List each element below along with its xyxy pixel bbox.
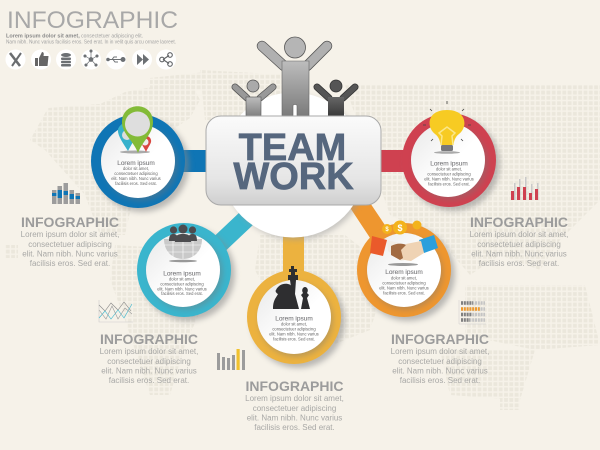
text block: right upper: facilisis eros. Sed erat. xyxy=(479,259,559,268)
text: blue ring xyxy=(111,160,161,186)
text block: right lower: Lorem ipsum dolor sit amet, xyxy=(391,347,489,356)
text: blue ring: elit. Nam nibh. Nunc varius xyxy=(111,176,161,181)
text block: centre xyxy=(245,378,344,432)
text block: left lower: INFOGRAPHIC xyxy=(100,331,198,347)
text: red ring: consectetuer adipiscing xyxy=(427,172,471,176)
figure: large centre xyxy=(262,37,327,119)
figures: team xyxy=(235,37,355,119)
text: orange ring: elit. Nam nibh. Nunc varius xyxy=(379,286,429,290)
text: red ring: dolor sit amet, xyxy=(436,166,462,172)
panel: red ring xyxy=(402,101,500,211)
mini chart: lines xyxy=(99,300,133,322)
text: cyan ring: consectetuer adipiscing xyxy=(160,282,204,286)
central card xyxy=(206,116,381,205)
text: cyan ring xyxy=(157,270,207,296)
text block: right lower: INFOGRAPHIC xyxy=(391,331,489,347)
mini chart: blue xyxy=(52,183,80,204)
panel: orange ring xyxy=(357,220,455,321)
text block: right upper: consectetuer adipiscing xyxy=(477,240,561,249)
text block: centre: INFOGRAPHIC xyxy=(246,378,344,394)
text block: right lower: facilisis eros. Sed erat. xyxy=(400,376,480,385)
text block: right lower: elit. Nam nibh. Nunc varius xyxy=(392,366,488,376)
text block: centre: elit. Nam nibh. Nunc varius xyxy=(247,414,342,422)
text: orange ring: dolor sit amet, xyxy=(391,276,417,280)
icon: handshake and coins xyxy=(370,220,438,266)
central circle xyxy=(220,92,368,240)
icon: usb xyxy=(107,57,125,62)
mini chart: rows xyxy=(459,300,486,324)
text: orange ring: consectetuer adipiscing xyxy=(382,280,426,286)
icon: handshake and coins: $ xyxy=(397,223,403,233)
panel: blue ring xyxy=(91,106,189,212)
icon: share xyxy=(160,53,172,66)
text: orange ring: Lorem ipsum xyxy=(385,269,423,276)
subtitle: Nam nibh. Nunc varius facilisis eros. Sed erat. In in velit quis arcu ornare laoreet. xyxy=(6,40,176,46)
text: blue ring: dolor sit amet, xyxy=(123,166,149,171)
text block: right upper xyxy=(470,214,568,268)
text block: left lower: consectetuer adipiscing xyxy=(107,357,191,366)
text: yellow ring: elit. Nam nibh. Nunc varius xyxy=(269,332,319,336)
text: blue ring: Lorem ipsum xyxy=(117,160,155,167)
text block: left upper: facilisis eros. Sed erat. xyxy=(30,259,110,268)
icon: fast forward xyxy=(137,54,149,65)
text: cyan ring: elit. Nam nibh. Nunc varius xyxy=(157,286,207,292)
panel: yellow ring xyxy=(247,266,345,368)
text: orange ring: facilisis eros. Sed erat. xyxy=(383,290,425,296)
text: red ring: facilisis eros. Sed erat. xyxy=(428,182,470,186)
text: orange ring xyxy=(379,269,429,296)
text block: centre: Lorem ipsum dolor sit amet, xyxy=(245,394,344,403)
icon: tools xyxy=(10,53,21,66)
text: yellow ring: consectetuer adipiscing xyxy=(272,326,316,332)
text block: left lower xyxy=(100,331,198,385)
text block: right lower: consectetuer adipiscing xyxy=(398,357,482,366)
text block: left upper: INFOGRAPHIC xyxy=(21,214,119,230)
subtitle: Lorem ipsum dolor sit amet, consectetuer adipiscing elit. xyxy=(6,34,143,40)
icon: people on globe xyxy=(164,224,202,262)
text block: right lower xyxy=(391,331,489,385)
text block: left upper: Lorem ipsum dolor sit amet, xyxy=(21,230,119,239)
text: yellow ring xyxy=(269,316,319,342)
text: red ring xyxy=(424,160,474,186)
text block: left upper xyxy=(21,214,119,268)
text: cyan ring: Lorem ipsum xyxy=(163,270,201,278)
text: yellow ring: Lorem ipsum xyxy=(275,316,313,322)
world map dots xyxy=(5,70,600,410)
text block: left upper: consectetuer adipiscing xyxy=(28,240,112,249)
text: cyan ring: facilisis eros. Sed erat. xyxy=(161,291,203,296)
text block: left lower: facilisis eros. Sed erat. xyxy=(109,376,189,385)
text: yellow ring: dolor sit amet, xyxy=(281,322,307,326)
connector bars xyxy=(175,150,415,275)
text: blue ring: consectetuer adipiscing xyxy=(114,171,158,176)
text: red ring: Lorem ipsum xyxy=(430,160,468,168)
mini chart: red xyxy=(511,177,538,200)
heading: team work: TEAM xyxy=(239,127,346,169)
text: cyan ring: dolor sit amet, xyxy=(169,276,195,282)
icon: chess pieces xyxy=(273,266,310,309)
icon: light bulb xyxy=(423,101,471,154)
text: red ring: elit. Nam nibh. Nunc varius xyxy=(424,176,474,182)
heading: team work: WORK xyxy=(233,156,354,198)
icon: thumbs up xyxy=(35,52,48,66)
title: INFOGRAPHIC xyxy=(7,7,178,34)
panel: cyan ring xyxy=(137,223,235,321)
icon: database xyxy=(61,53,71,66)
text: blue ring: facilisis eros. Sed erat. xyxy=(115,181,157,186)
text block: left lower: Lorem ipsum dolor sit amet, xyxy=(100,347,198,356)
text: yellow ring: facilisis eros. Sed erat. xyxy=(273,336,315,342)
mini chart: yellow xyxy=(217,349,245,370)
text block: left upper: elit. Nam nibh. Nunc varius xyxy=(22,250,118,258)
figure: right small xyxy=(317,80,355,119)
figure: left small xyxy=(235,80,273,119)
text block: centre: facilisis eros. Sed erat. xyxy=(254,423,335,432)
text block: left lower: elit. Nam nibh. Nunc varius xyxy=(101,366,197,376)
text block: centre: consectetuer adipiscing xyxy=(253,404,336,413)
icon: map pins xyxy=(118,106,153,154)
icon row xyxy=(6,50,176,70)
text block: right upper: elit. Nam nibh. Nunc varius xyxy=(471,250,567,258)
text block: right upper: Lorem ipsum dolor sit amet, xyxy=(470,230,568,239)
icon: network xyxy=(84,50,98,66)
subtitle xyxy=(6,34,176,46)
icon: handshake and coins: $ xyxy=(385,227,389,233)
text block: right upper: INFOGRAPHIC xyxy=(470,214,568,230)
heading: team work xyxy=(233,127,354,198)
